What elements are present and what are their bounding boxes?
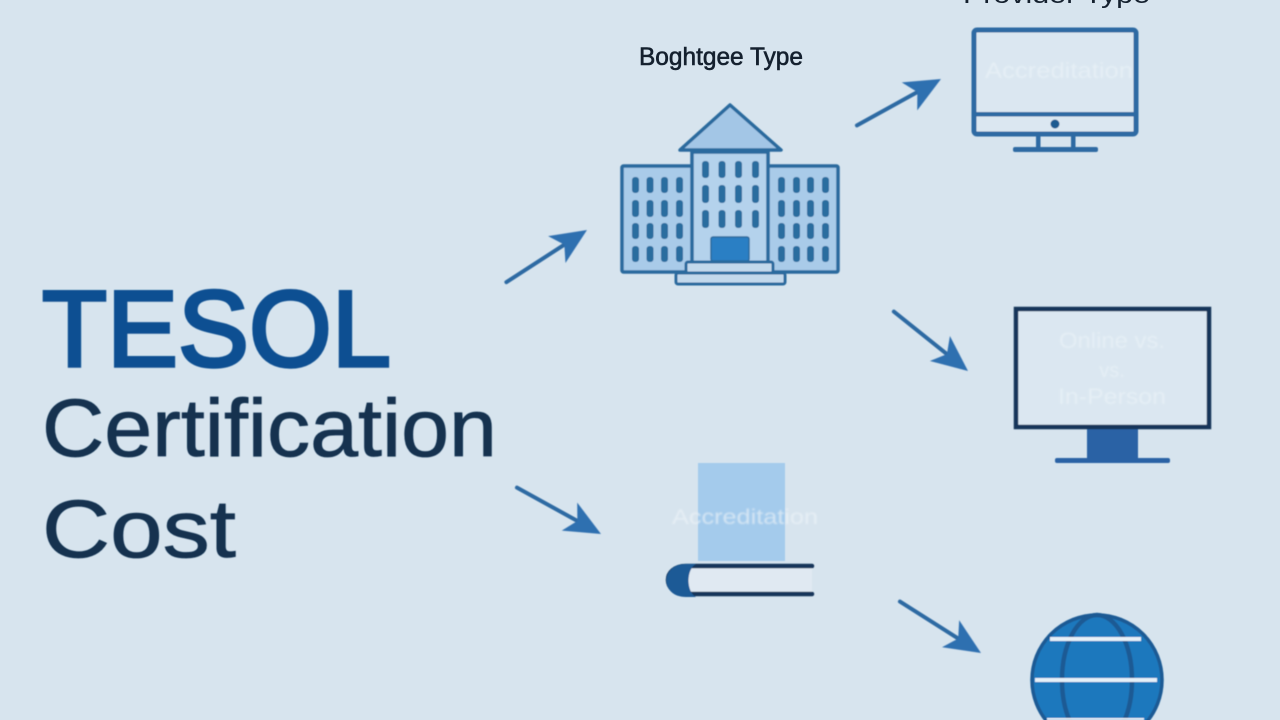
book: [668, 566, 812, 594]
icon: university building: [622, 105, 838, 284]
title: Certification: [42, 383, 497, 474]
monitor label: vs.: [1099, 360, 1125, 382]
book label: Accreditation: [672, 506, 818, 529]
arrow: title to building: [496, 217, 596, 297]
arrow: building to provider monitor: [847, 65, 949, 140]
monitor label: [1058, 328, 1166, 409]
title: Cost: [42, 484, 236, 575]
door: [711, 237, 749, 261]
heading: garbled provider type label: Boghtgee Type: [639, 43, 803, 71]
title: [42, 268, 497, 575]
arrow: book to globe: [890, 587, 990, 667]
arrow: title to book: [507, 473, 609, 548]
icon: monitor comparing online and in-person: [1016, 309, 1209, 463]
icon: globe: [1032, 615, 1162, 720]
monitor label: In-Person: [1058, 384, 1166, 409]
lower step: [676, 273, 785, 284]
icon: book with accreditation page: [666, 463, 818, 597]
title: TESOL: [42, 268, 391, 389]
monitor label: Online vs.: [1059, 328, 1165, 353]
icon: desktop monitor with accreditation label: [974, 30, 1136, 152]
roof: [680, 105, 781, 150]
arrow: building to online monitor: [882, 298, 978, 383]
right wing: [766, 166, 838, 272]
left wing: [622, 166, 694, 272]
monitor label: Accreditation: [985, 58, 1133, 83]
upper step: [686, 262, 773, 273]
central tower: [692, 152, 768, 264]
